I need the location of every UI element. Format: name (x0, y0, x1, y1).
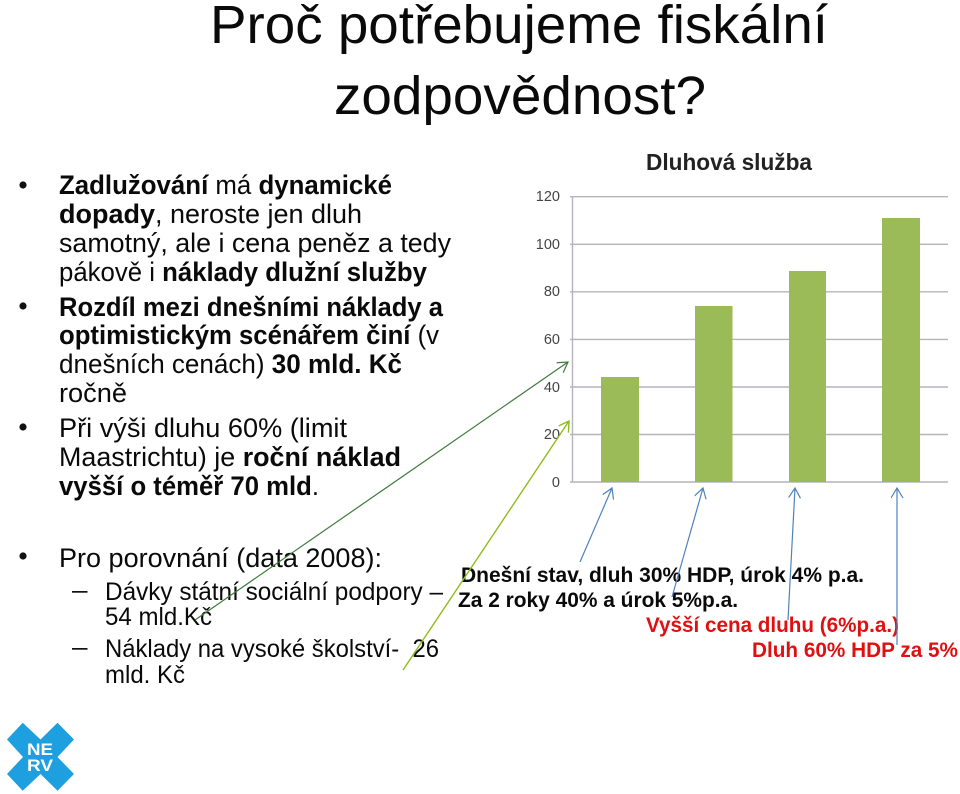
logo: NERV: RV (27, 757, 53, 775)
axis labels: 80 (544, 284, 560, 300)
text block: main bullets (19, 170, 451, 501)
bar chart: Dluhová služba (536, 149, 948, 491)
bullet: dynamic effects: pákově i náklady dlužní služby (59, 257, 427, 287)
chart title: Dluhová služba (646, 149, 812, 175)
text block: comparison: mld. Kč (105, 661, 185, 689)
logo: NERV: NE (27, 741, 53, 759)
text block: comparison: Dávky státní sociální podpory – (105, 578, 443, 606)
labels under chart: Dnešní stav, dluh 30% HDP, úrok 4% p.a. (461, 564, 864, 587)
axis labels: 20 (544, 427, 560, 443)
text block: comparison: Náklady na vysoké školství- 26 (105, 635, 439, 663)
axis labels: 40 (544, 380, 560, 396)
labels under chart: Za 2 roky 40% a úrok 5%p.a. (458, 589, 738, 612)
bullet: difference between scenarios: dnešních cenách) 30 mld. Kč (59, 349, 402, 379)
arrow: light green from higher education (403, 421, 569, 670)
bullet: dynamic effects (19, 170, 451, 287)
bullet: 60 percent debt: Při výši dluhu 60% (limit (59, 413, 347, 443)
title (210, 0, 828, 126)
bullet: dynamic effects: Zadlužování má dynamické (59, 170, 392, 200)
text block: comparison (19, 543, 443, 689)
bullet: difference between scenarios: ročně (59, 378, 127, 408)
labels under chart (458, 564, 958, 662)
bars (601, 218, 920, 482)
axis labels: 60 (544, 332, 560, 348)
bullet: dynamic effects: samotný, ale i cena peněz a tedy (59, 228, 451, 258)
bullet: dynamic effects: dopady, neroste jen dluh (59, 199, 362, 229)
axis labels (536, 189, 560, 491)
bullet: difference between scenarios (19, 292, 444, 408)
text block: comparison: 54 mld.Kč (105, 603, 212, 631)
arrow: dark green from benefits (195, 362, 568, 620)
labels under chart: Vyšší cena dluhu (6%p.a.) (646, 614, 899, 637)
logo: NERV (7, 723, 74, 791)
bullet: 60 percent debt (19, 413, 401, 501)
text block: comparison: Pro porovnání (data 2008): (59, 543, 382, 573)
axis labels: 120 (536, 189, 560, 205)
axis labels: 0 (552, 475, 560, 491)
bullet: difference between scenarios: Rozdíl mezi dnešními náklady a (59, 292, 444, 322)
axis labels: 100 (536, 237, 560, 253)
bullet: 60 percent debt: Maastrichtu) je roční náklad (59, 442, 401, 472)
labels under chart: Dluh 60% HDP za 5% (752, 639, 958, 662)
bullet: 60 percent debt: vyšší o téměř 70 mld. (59, 471, 319, 501)
title: zodpovědnost? (334, 66, 706, 126)
bullet: difference between scenarios: optimistickým scénářem činí (v (59, 320, 439, 350)
arrows: scenarios to bars (580, 488, 897, 645)
